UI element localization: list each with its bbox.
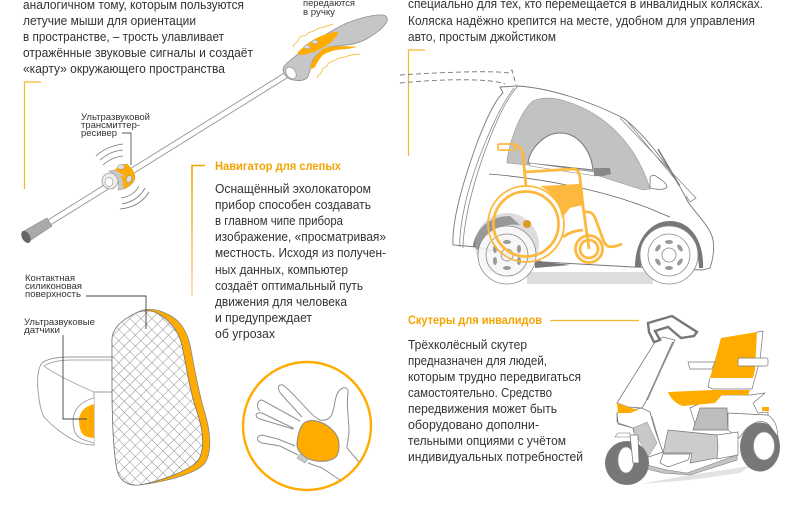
text block: car description: Коляска надёжно крепится на месте, удобном для управления [408,14,755,28]
steering column [617,337,675,408]
illustration: mobility scooter [605,316,780,485]
window [507,98,650,190]
text block: car description [408,0,763,44]
text block: navigator: об угрозах [215,327,276,341]
bracket: navigator [192,166,205,296]
seat cushion [668,390,750,406]
wrist sensor strap [297,453,309,463]
text block: scooters: передвижения может быть [408,402,557,416]
heading: scooters: Скутеры для инвалидов [408,313,542,327]
label: contact surface: поверхность [25,289,81,299]
door pillar [460,86,518,248]
label: ultrasonic sensors: Ультразвуковые [24,317,95,327]
rear fender [728,413,778,438]
column rail [647,342,673,400]
label: ultrasonic sensors [24,317,95,419]
transmitter ring [102,164,135,190]
handlebar [648,316,697,342]
label: contact surface [25,273,146,329]
text block: navigator: Оснащённый эхолокатором [215,182,371,196]
car body [453,86,714,270]
illustration: wearable band with pad [38,309,210,485]
ground shadow [527,272,653,284]
hand outline [256,385,359,480]
front wheel [605,441,649,485]
bracket: cane text [24,82,41,189]
vibration waves [293,25,360,78]
palm sensor [297,421,339,461]
floor rail [635,455,737,475]
front cowl [617,408,663,460]
mesh contact pad [112,309,210,485]
text block: navigator: создаёт оптимальный путь [215,279,363,293]
label: transmitter: Ультразвуковой [81,112,150,122]
text block: cane description: «карту» окружающего пространства [23,62,225,76]
rear tail [762,407,769,411]
rear wheel shade [475,213,539,277]
label: transmitter: ресивер [81,128,117,138]
axle cap [615,433,630,437]
rear wheel arch [473,216,520,250]
wrist band [38,357,112,445]
label: vibrations to the handle: в ручку [303,7,336,17]
windshield strip [620,118,696,202]
rear wheel [740,422,780,472]
text block: navigator: и предупреждает [215,311,312,325]
cane handle [283,15,387,81]
text block: scooters [408,338,583,464]
label: transmitter: трансмиттер- [81,120,140,130]
illustration: smart cane [19,15,387,245]
ground shadow [640,466,750,484]
front fender panel [633,422,657,457]
text block: navigator: в главном чипе прибора [215,214,343,228]
seat back frame [708,331,763,389]
right side panel [717,432,738,459]
ultrasound waves [96,144,149,209]
right armrest [738,358,768,366]
rear wheel [478,226,536,284]
under seat wing [690,393,768,424]
label: transmitter [81,112,150,165]
text block: cane description: отражённые звуковые сигналы и создаёт [23,46,253,60]
underbody shadow [535,261,570,268]
left armrest [688,362,715,369]
text block: scooters: предназначен для людей, [408,354,547,368]
seat pedestal [693,408,728,430]
text block: navigator: прибор способен создавать [215,198,371,212]
text block: scooters: оборудовано дополни- [408,418,539,432]
heading rule [550,320,639,322]
cane shaft [50,74,288,222]
illustration: car with wheelchair [400,70,714,284]
text block: scooters: самостоятельно. Средство [408,386,552,400]
label: contact surface: силиконовая [25,281,82,291]
front wheel arch [635,221,703,268]
column orange panel [617,403,638,413]
ultrasonic sensor [79,404,94,438]
illustration: hand in circle [243,362,371,490]
text block: navigator: движения для человека [215,295,347,309]
wiper [658,149,679,185]
text block: cane description: в пространстве, – трость улавливает [23,30,224,44]
cane tip [19,218,52,245]
text block: scooters: которым трудно передвигаться [408,370,581,384]
footplate [660,454,690,467]
text block: scooters: индивидуальных потребностей [408,450,583,464]
footwell panel [663,430,718,463]
seat back [710,332,757,378]
fork [630,435,639,463]
front wheel [640,226,698,284]
door swing arc [400,70,516,85]
label: vibrations to the handle [303,0,355,17]
label: ultrasonic sensors: датчики [24,325,60,335]
body lines [489,174,670,217]
text block: car description: авто, простым джойстиком [408,30,556,44]
text block: cane description [23,0,253,76]
label: contact surface: Контактная [25,273,75,283]
mirror [650,175,667,189]
text block: navigator: местность. Исходя из получен- [215,246,386,260]
text block: navigator [215,182,386,341]
heading: navigator: Навигатор для слепых [215,159,341,173]
front body [617,413,660,458]
bracket: car text [408,50,425,156]
text block: cane description: летучие мыши для ориентации [23,14,196,28]
text block: navigator: ных данных, компьютер [215,263,348,277]
text block: scooters: тельными опциями с учётом [408,434,566,448]
text block: scooters: Трёхколёсный скутер [408,338,527,352]
wheelchair [488,144,622,262]
text block: navigator: изображение, «просматривая» [215,230,386,244]
